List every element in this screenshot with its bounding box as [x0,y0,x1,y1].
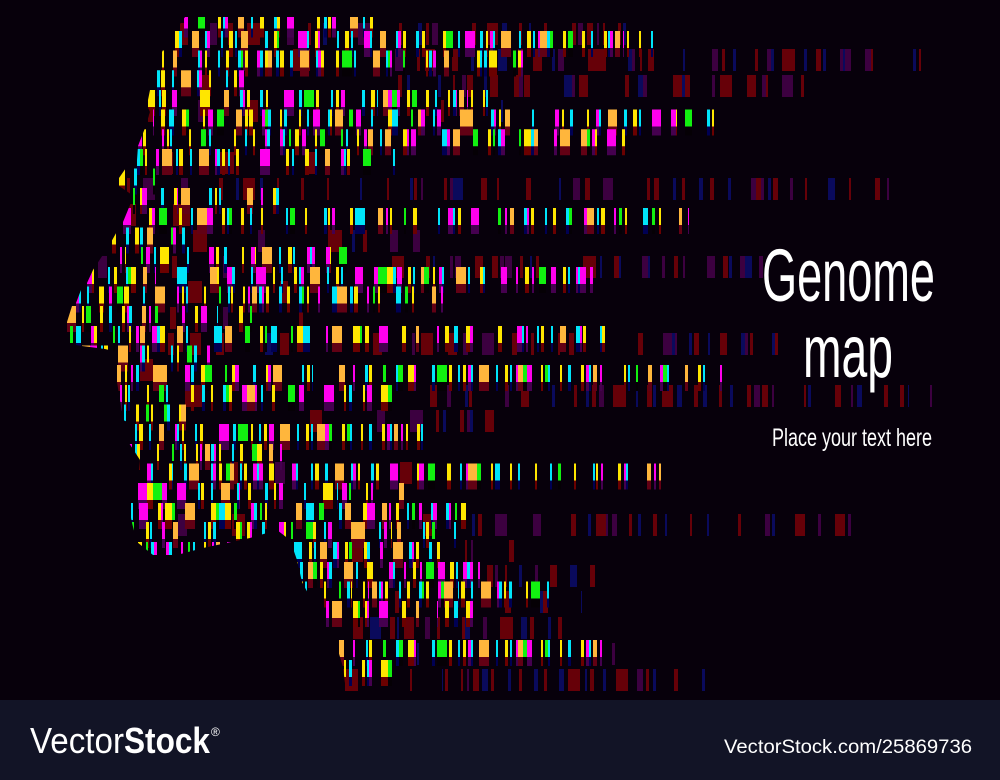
subtitle placeholder text: Place your text here [772,424,932,452]
footer logo: VectorStock: Stock [124,720,211,761]
footer logo: VectorStock [30,720,220,761]
dim trailing bands [98,34,932,680]
face-shaped genome map [67,20,932,680]
footer logo: VectorStock: Vector [30,720,124,761]
footer bar [0,700,1000,780]
title: Genome map: map [803,310,893,393]
footer image id: VectorStock.com/25869736 [724,737,972,758]
bright genome rows [67,20,722,668]
footer logo: VectorStock: ® [211,725,220,739]
title: Genome map [762,234,935,393]
